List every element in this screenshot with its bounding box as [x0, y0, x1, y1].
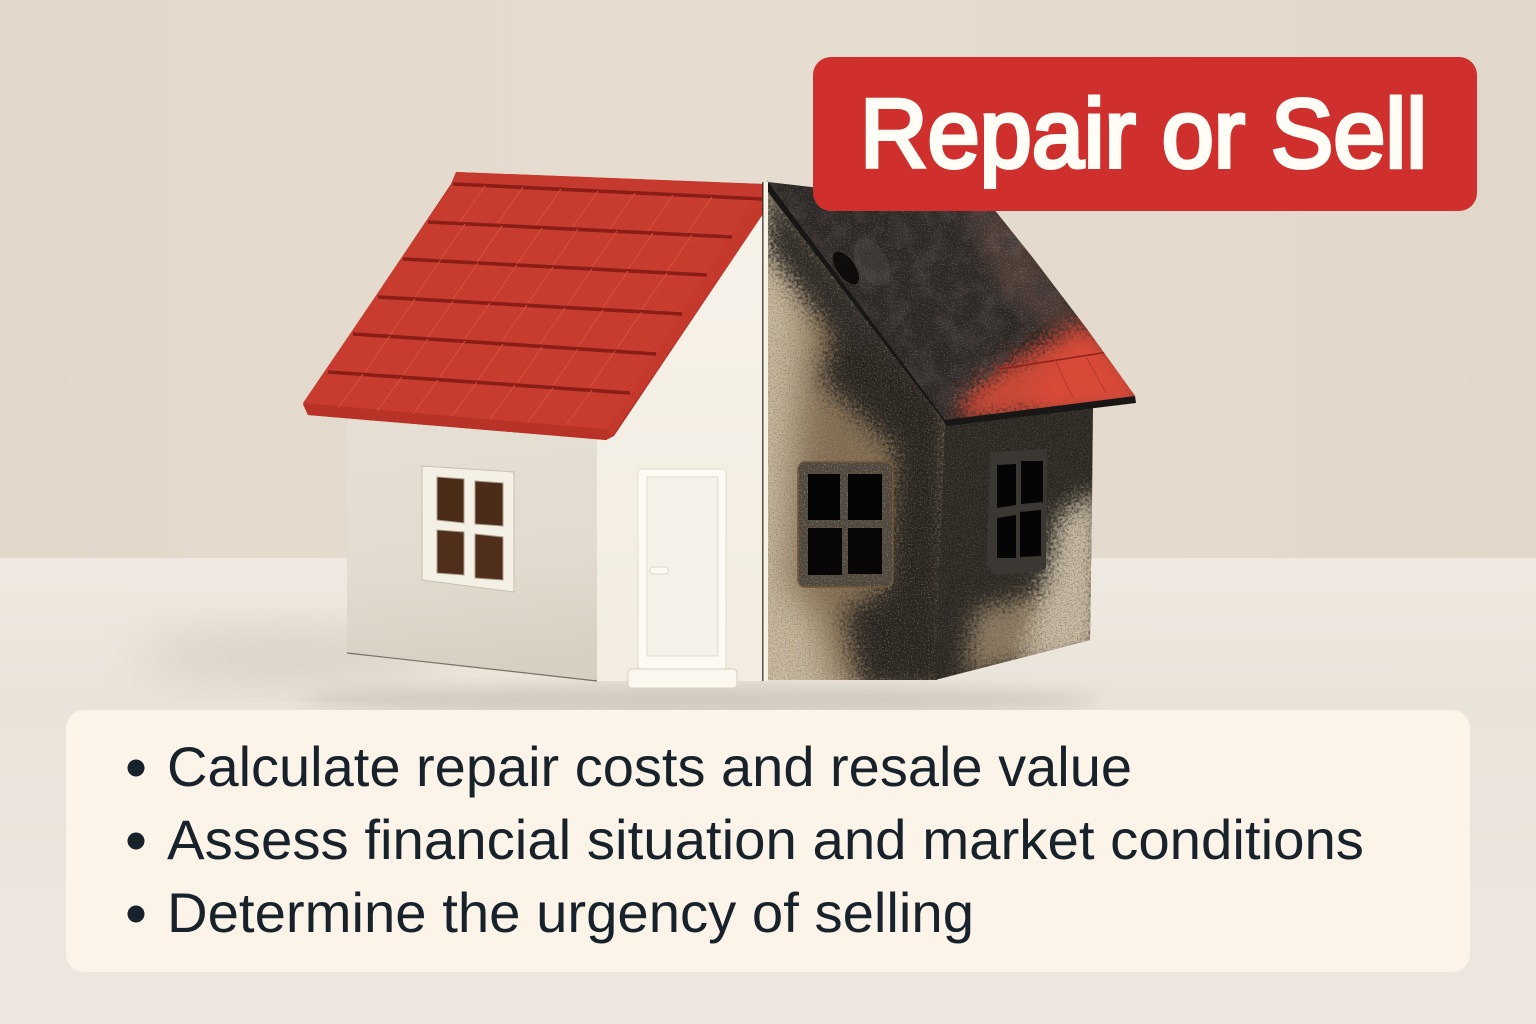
roof texture	[768, 182, 1066, 420]
centre divider	[762, 182, 768, 681]
wall base line	[347, 653, 597, 681]
bullet item 3: Determine the urgency of selling	[167, 881, 974, 944]
house illustration	[300, 172, 1145, 690]
roof grain	[300, 180, 765, 435]
side wall	[597, 210, 763, 681]
charred roof	[760, 175, 1145, 430]
front wall	[347, 420, 597, 681]
burnt left wall	[767, 180, 945, 680]
door	[628, 469, 737, 688]
bullet item 2: Assess financial situation and market conditions	[167, 808, 1364, 871]
burnt right wall	[935, 408, 1093, 680]
bullet item 1: Calculate repair costs and resale value	[167, 735, 1132, 798]
window	[422, 466, 514, 592]
background wall	[0, 0, 1536, 559]
clean half of house	[300, 172, 765, 688]
red tiled roof	[300, 172, 765, 440]
background floor	[0, 558, 1536, 1024]
checklist panel	[66, 710, 1470, 972]
title badge	[813, 57, 1477, 211]
burnt half of house	[760, 175, 1145, 690]
tile seams	[338, 186, 712, 424]
burnt window right	[987, 449, 1047, 575]
title text: Repair or Sell	[860, 79, 1427, 188]
floor shadow	[140, 629, 1100, 714]
tile course lines	[328, 184, 762, 393]
burnt window left	[798, 462, 893, 587]
